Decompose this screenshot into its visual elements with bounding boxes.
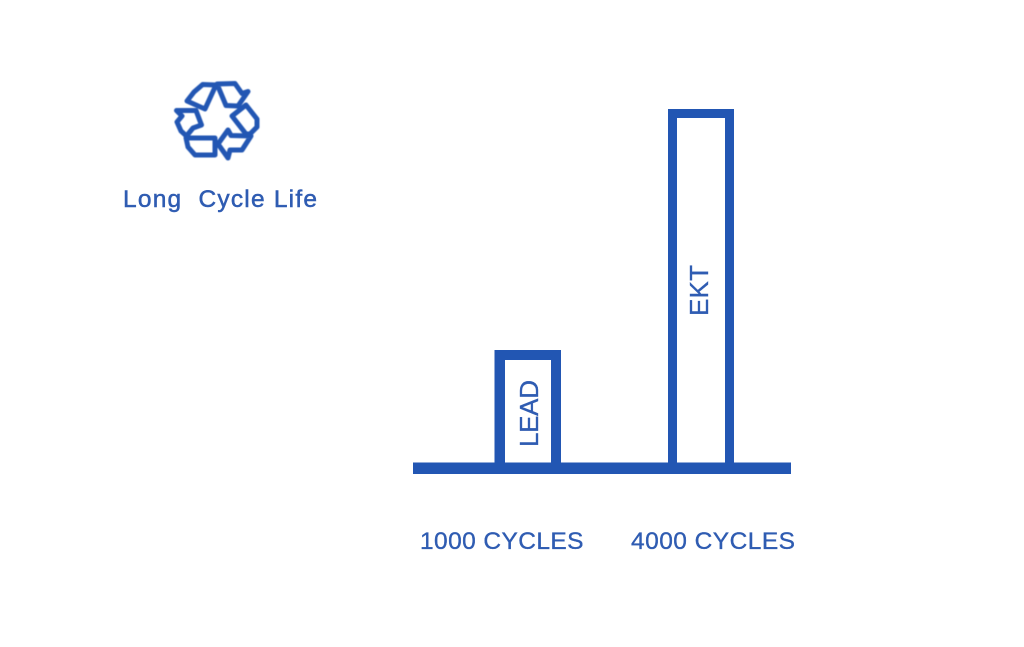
axis label: 4000 cycles: 4000 CYCLES: [631, 528, 795, 555]
heading: Long Cycle Life: Long Cycle Life: [123, 186, 317, 213]
axis baseline: [413, 462, 791, 474]
bar chart: cycle comparison: [413, 109, 795, 555]
bar label: LEAD: LEAD: [514, 380, 544, 447]
bar label: EKT: EKT: [684, 265, 714, 316]
icon: recycling symbol: [176, 84, 257, 158]
axis label: 1000 cycles: 1000 CYCLES: [420, 528, 584, 555]
bar: EKT: [668, 109, 734, 468]
bar: LEAD: [494, 350, 561, 468]
